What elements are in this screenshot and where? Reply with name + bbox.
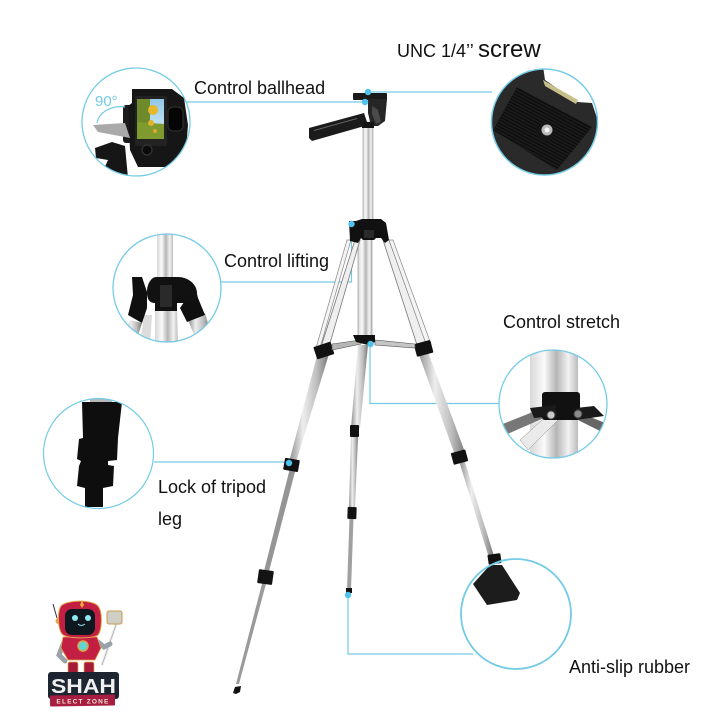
lock body xyxy=(77,402,122,507)
left leg xyxy=(233,240,360,694)
rounded hub xyxy=(147,277,197,311)
silver legs xyxy=(128,320,142,334)
label: control stretch: Control stretch xyxy=(503,312,620,332)
ribbed rubber pad xyxy=(493,87,592,170)
right arm xyxy=(578,418,604,430)
selfie stick xyxy=(102,611,122,665)
logo banner: ELECT ZONE xyxy=(56,698,110,706)
callout: control stretch xyxy=(499,345,610,465)
camera grip xyxy=(123,105,130,143)
label: control ballhead: Control ballhead xyxy=(194,78,325,98)
robot legs xyxy=(68,662,94,674)
camera body xyxy=(128,89,188,167)
callout: control lifting xyxy=(113,230,221,345)
center column xyxy=(346,122,373,593)
label: lock of tripod leg: leg xyxy=(158,509,182,529)
camera screen xyxy=(137,99,164,139)
logo: Shah Elect Zone robot xyxy=(48,600,122,707)
right black arm xyxy=(180,286,205,322)
anti-slip rubber foot xyxy=(473,565,520,605)
label: anti-slip rubber: Anti-slip rubber xyxy=(569,657,690,677)
robot arms xyxy=(59,642,110,661)
pan head and handle xyxy=(309,93,387,141)
large column xyxy=(530,350,578,458)
camera buttons xyxy=(142,145,152,155)
leg hub xyxy=(349,219,389,243)
knurled ring xyxy=(542,392,580,420)
rotation arc xyxy=(97,107,125,123)
robot torso xyxy=(61,637,101,660)
chest core xyxy=(78,641,88,651)
callout connector lines xyxy=(154,92,499,654)
label: lock of tripod leg: Lock of tripod xyxy=(158,477,266,497)
callout: anti-slip rubber circle xyxy=(461,559,571,669)
tilt plate xyxy=(93,123,130,138)
callout: leg lock xyxy=(44,398,154,508)
screw xyxy=(536,123,554,141)
column xyxy=(157,234,173,277)
90 degree label: 90° xyxy=(95,93,118,110)
logo banner: SHAH xyxy=(51,676,116,698)
left black arm xyxy=(128,277,147,323)
label: control lifting: Control lifting xyxy=(224,251,329,271)
tripod xyxy=(233,93,520,694)
connector dots xyxy=(286,89,374,598)
robot antenna xyxy=(53,604,57,618)
eyepiece xyxy=(168,107,183,131)
ball head lower mount xyxy=(95,142,128,178)
robot head xyxy=(56,600,101,638)
callout: UNC screw plate xyxy=(488,66,600,178)
label: UNC screw: UNC 1/4’’ screw xyxy=(397,36,541,63)
left arm xyxy=(504,412,542,434)
spreader arms xyxy=(332,335,415,350)
callout: control ballhead xyxy=(82,68,190,178)
right leg xyxy=(383,240,502,565)
mounting plate xyxy=(492,70,597,174)
silver tube end xyxy=(90,399,112,402)
bubble level xyxy=(543,80,578,104)
label: lock of tripod leg xyxy=(158,477,266,529)
logo banner xyxy=(48,672,119,707)
